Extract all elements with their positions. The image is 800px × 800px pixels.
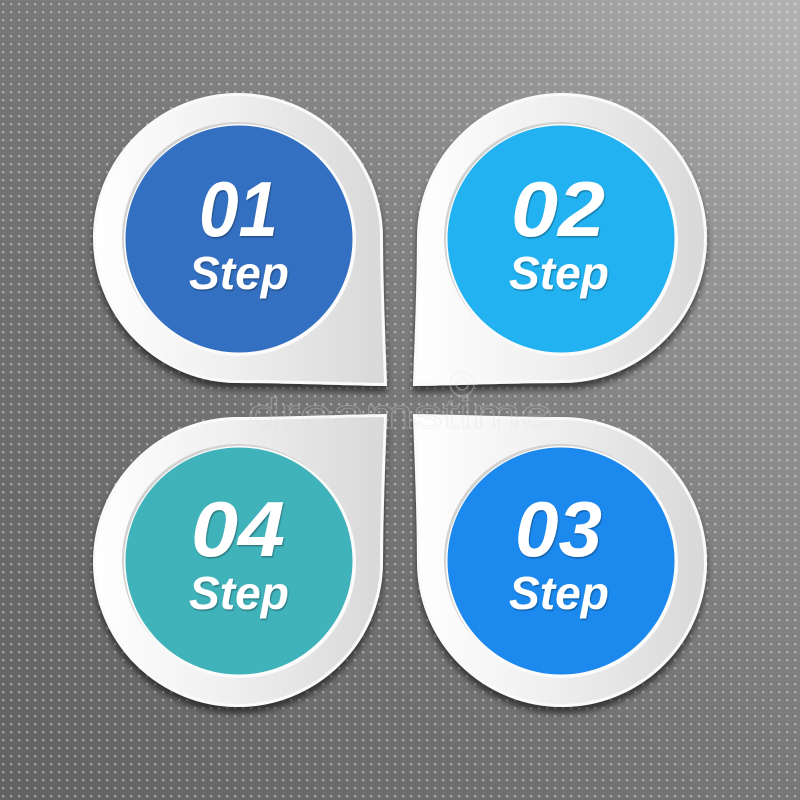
number: 03: 03 [515,485,602,573]
panel: step 01 [95,95,386,385]
label: step 02: Step [509,247,609,299]
label: step 01: Step [189,247,289,299]
watermark: dreamstime [248,390,553,437]
teardrop: step 02 [414,95,706,385]
number: 04: 04 [191,485,285,573]
circle: step 01 [122,122,356,356]
teardrop: step 01 [95,95,386,385]
circle: step 02 [444,122,678,356]
circle: step 04 [122,444,356,678]
circle: step 03 [444,444,678,678]
panel: step 02 [414,95,706,385]
label: step 03: Step [509,567,609,619]
number: 01: 01 [199,165,278,253]
panel: step 04 [95,416,386,706]
panel: step 03 [414,416,706,706]
number: 02: 02 [511,165,605,253]
watermark [248,372,553,437]
label: step 04: Step [189,567,289,619]
teardrop: step 04 [95,416,386,706]
teardrop: step 03 [414,416,706,706]
